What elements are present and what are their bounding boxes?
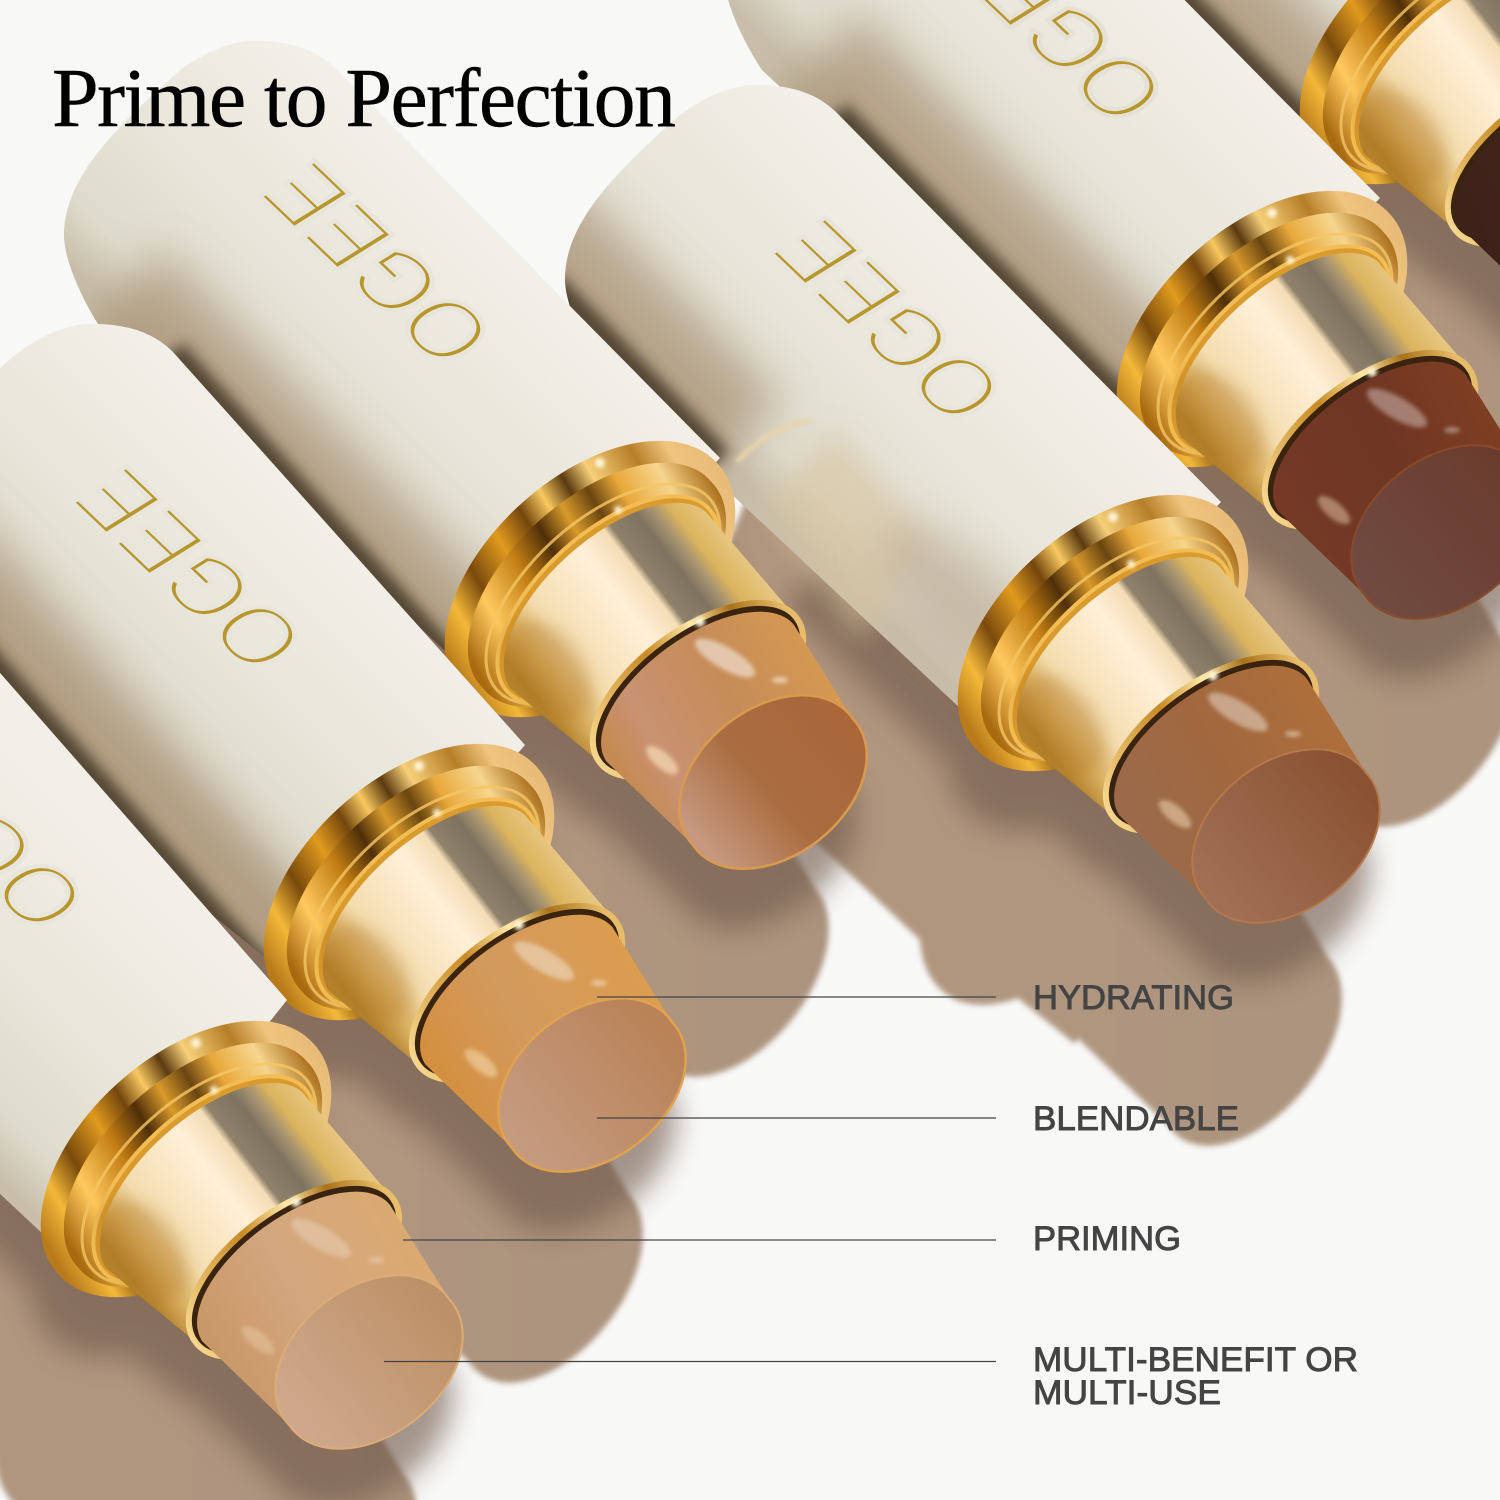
callout: multi-benefit or multi-use — [384, 1341, 1358, 1412]
product stick 2 (golden tan) — [0, 324, 686, 1172]
callout: blendable: BLENDABLE — [1033, 1100, 1239, 1138]
logo text: OGEE — [749, 204, 1027, 439]
callout: multi-benefit or multi-use: MULTI-USE — [1033, 1374, 1221, 1412]
product stick 5 (deep brown) — [724, 0, 1500, 619]
product stick 1 (light beige) — [0, 450, 463, 1449]
product stick 6 (top right, darkest) — [1184, 0, 1500, 266]
callout: multi-benefit or multi-use: MULTI-BENEFIT OR — [1033, 1341, 1358, 1379]
reflected collar glow — [737, 420, 1090, 734]
product stick 3 (warm caramel) — [64, 41, 867, 869]
logo text: OGEE — [238, 147, 516, 382]
title: Prime to Perfection — [52, 52, 676, 145]
logo text: OGEE — [50, 453, 328, 688]
callout: priming: PRIMING — [1033, 1220, 1181, 1258]
product stick 4 (rich tan) — [500, 85, 1380, 923]
callout: hydrating: HYDRATING — [1033, 979, 1234, 1017]
